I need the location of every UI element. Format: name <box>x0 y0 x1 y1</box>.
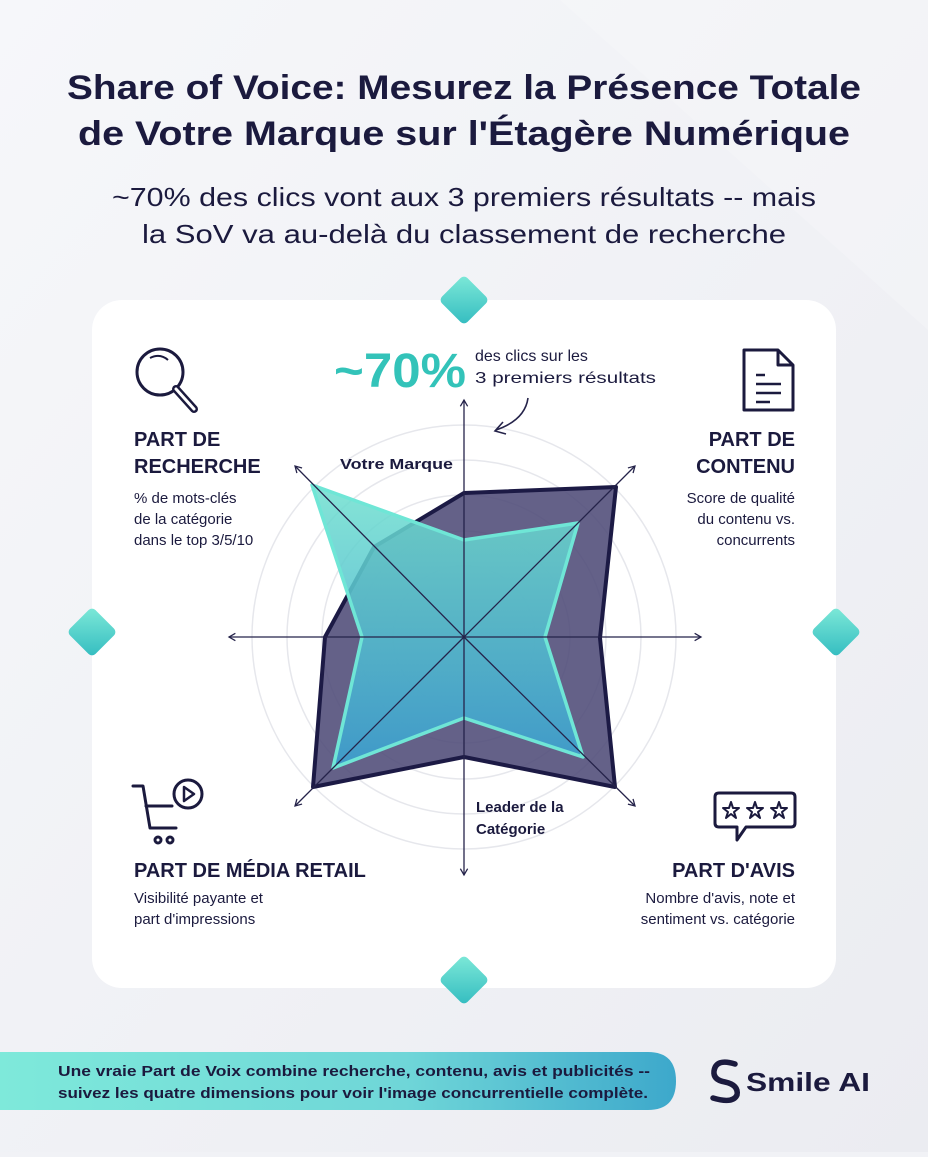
panel: recherche: dans le top 3/5/10 <box>134 532 253 549</box>
title <box>67 69 861 153</box>
panel: recherche: de la catégorie <box>134 511 232 528</box>
chart label: Leader de la Catégorie: Catégorie <box>476 821 545 838</box>
panel: recherche <box>134 349 261 549</box>
icon: document <box>744 350 793 410</box>
panel: contenu: concurrents <box>717 532 795 549</box>
panel: média retail: part d'impressions <box>134 911 255 928</box>
icon: cart with play <box>133 780 202 843</box>
chart label: Leader de la Catégorie: Leader de la <box>476 799 564 816</box>
subtitle: la SoV va au-delà du classement de recherche <box>142 219 786 249</box>
subtitle: ~70% des clics vont aux 3 premiers résultats -- mais <box>112 182 816 212</box>
panel: contenu <box>687 350 795 549</box>
chart: your brand polygon <box>312 485 583 768</box>
panel: média retail <box>133 780 366 928</box>
panel: média retail: Visibilité payante et <box>134 890 264 907</box>
panel: contenu: CONTENU <box>696 456 795 478</box>
callout: 70%: des clics sur les <box>475 348 588 365</box>
title: Share of Voice: Mesurez la Présence Totale <box>67 69 861 107</box>
icon: magnifier <box>137 349 194 409</box>
footer banner <box>0 1052 676 1110</box>
callout: 70%: ~70% <box>334 345 466 398</box>
chart label: Leader de la Catégorie <box>476 799 564 838</box>
panel: recherche: % de mots-clés <box>134 490 237 507</box>
logo: Smile AI: Smile AI <box>746 1067 870 1097</box>
footer banner: Une vraie Part de Voix combine recherche, contenu, avis et publicités -- <box>58 1063 650 1080</box>
subtitle <box>112 182 816 249</box>
callout: 70%: 3 premiers résultats <box>475 370 656 387</box>
panel: contenu: du contenu vs. <box>697 511 795 528</box>
icon: diamond right <box>811 607 861 657</box>
panel: contenu: Score de qualité <box>687 490 795 507</box>
panel: avis: sentiment vs. catégorie <box>641 911 795 928</box>
panel: avis <box>641 793 796 928</box>
logo: Smile AI <box>713 1062 870 1100</box>
panel: média retail: PART DE MÉDIA RETAIL <box>134 859 366 882</box>
panel: contenu: PART DE <box>709 429 795 451</box>
panel: avis: Nombre d'avis, note et <box>645 890 796 907</box>
icon: diamond top <box>439 275 489 325</box>
chart: category leader polygon <box>313 487 616 787</box>
arrow: callout curve <box>496 398 528 430</box>
icon: speech bubble stars <box>715 793 795 840</box>
icon: diamond left <box>67 607 117 657</box>
radar chart <box>229 400 701 875</box>
footer banner: suivez les quatre dimensions pour voir l'image concurrentielle complète. <box>58 1085 648 1102</box>
panel: recherche: PART DE <box>134 429 220 451</box>
chart label: Votre Marque: Votre Marque <box>340 456 453 473</box>
panel: recherche: RECHERCHE <box>134 456 261 478</box>
panel: avis: PART D'AVIS <box>672 860 795 882</box>
callout: 70% <box>334 345 656 434</box>
panel: main card <box>67 275 861 1005</box>
icon: diamond bottom <box>439 955 489 1005</box>
title: de Votre Marque sur l'Étagère Numérique <box>78 115 850 153</box>
